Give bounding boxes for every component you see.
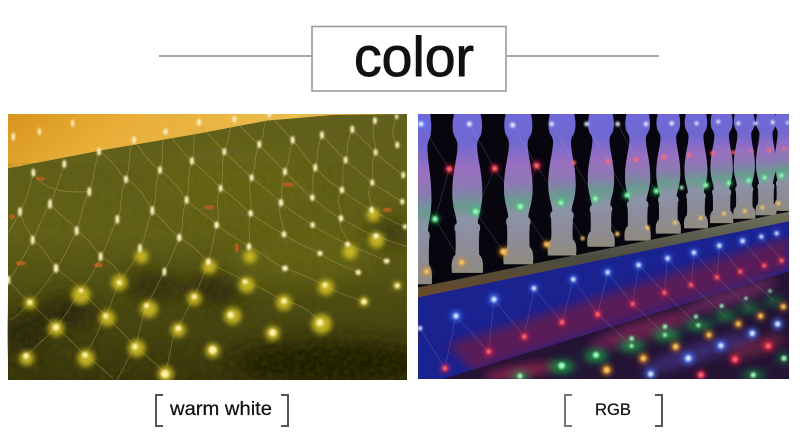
caption: warm white xyxy=(156,395,288,426)
balusters xyxy=(408,114,792,284)
lamp cores: upper rows xyxy=(6,112,407,285)
dead leaves xyxy=(9,177,392,267)
grass shading xyxy=(8,212,407,380)
panel: warm white photo xyxy=(0,112,433,383)
floor xyxy=(443,272,789,379)
light glows: green xyxy=(511,298,791,380)
net wires xyxy=(420,124,782,368)
dark background xyxy=(418,114,789,379)
caption: RGB: RGB xyxy=(595,400,631,419)
heading rule: left xyxy=(159,55,312,57)
LEDs: red xyxy=(443,147,786,378)
wall xyxy=(8,114,407,181)
net wires xyxy=(8,115,407,380)
lamp halos xyxy=(19,208,401,382)
title box xyxy=(312,26,506,91)
title: color xyxy=(354,25,474,88)
light glows: blue, red, orange xyxy=(416,119,787,380)
grass texture xyxy=(8,163,407,380)
rail xyxy=(418,212,789,297)
lamp cores: lower row xyxy=(23,279,400,378)
LEDs: orange xyxy=(424,201,786,373)
wall maroon band xyxy=(447,237,789,372)
blue lower wall xyxy=(418,221,789,379)
heading rule: right xyxy=(507,55,659,57)
grass xyxy=(8,114,407,380)
LEDs: blue xyxy=(418,120,789,377)
panel: RGB photo xyxy=(408,114,792,384)
floor reflections xyxy=(483,274,788,384)
caption: warm white: warm white xyxy=(169,399,272,420)
LEDs: green xyxy=(432,173,787,379)
caption: RGB xyxy=(565,395,662,426)
